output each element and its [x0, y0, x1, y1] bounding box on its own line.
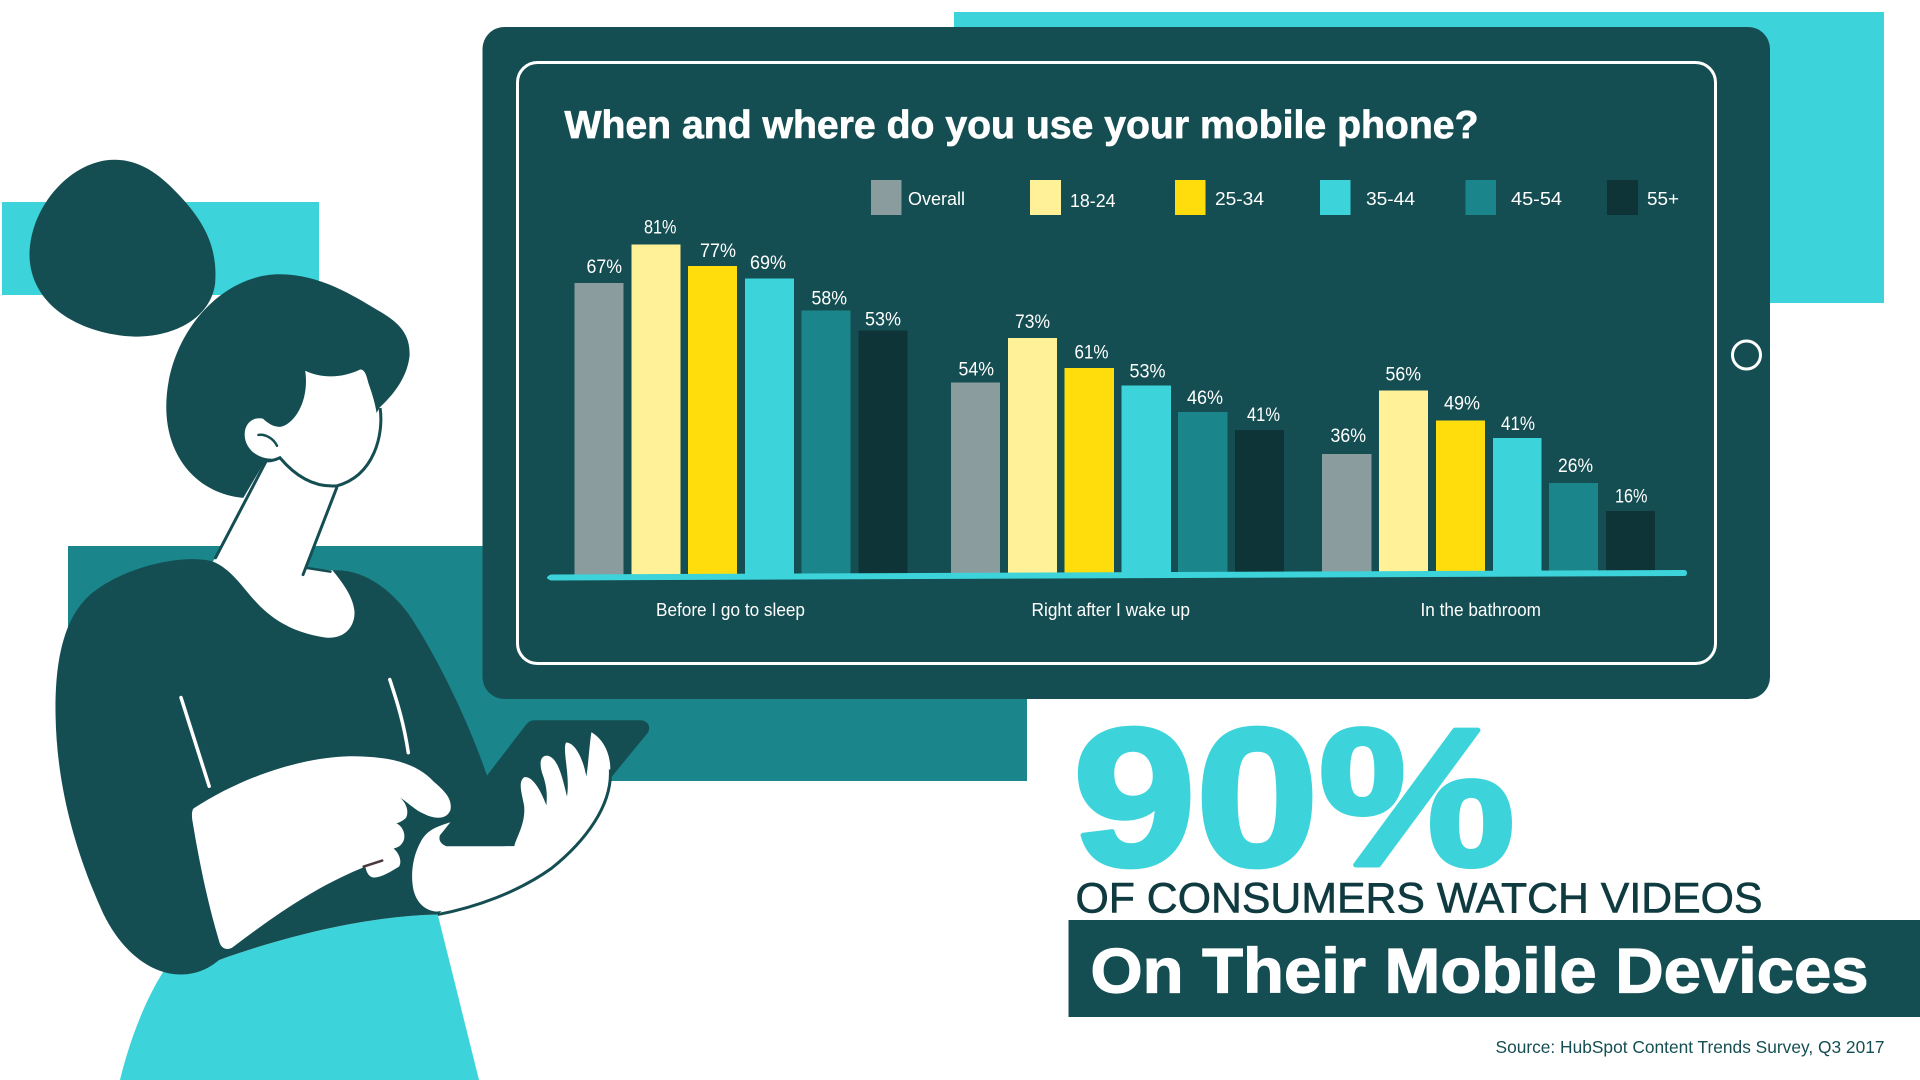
category label: Right after I wake up	[1032, 599, 1190, 620]
ear detail	[258, 435, 277, 446]
finger line	[364, 861, 382, 867]
hand outline	[438, 769, 610, 915]
bar: 45-54 46%	[1178, 388, 1228, 573]
bar: 35-44 41%: 41%	[1501, 414, 1535, 435]
bar: 18-24 81%	[632, 218, 680, 574]
bar: 45-54 58%: 58%	[812, 288, 847, 310]
legend item: 35-44: 35-44	[1366, 188, 1415, 209]
bar: 55+ 53%	[858, 310, 908, 574]
legend item: 55+: 55+	[1647, 188, 1679, 209]
bar: 25-34 49%: 49%	[1444, 394, 1480, 414]
legend	[871, 180, 1679, 215]
legend item: 45-54: 45-54	[1511, 188, 1562, 209]
background block: cyan top right	[954, 12, 1884, 303]
legend item: Overall	[871, 180, 965, 215]
bar: 18-24 56%: 56%	[1386, 364, 1421, 386]
neck lines	[216, 461, 337, 575]
bar cluster: Before I go to sleep	[574, 218, 908, 620]
bar: 25-34 61%: 61%	[1074, 342, 1109, 364]
background block: teal centre	[68, 546, 1027, 781]
statistic caption: OF CONSUMERS WATCH VIDEOS	[1076, 876, 1762, 922]
sleeve lines	[181, 680, 408, 786]
bar: 35-44 53%: 53%	[1130, 362, 1166, 382]
category label: Before I go to sleep	[656, 599, 805, 620]
hair	[166, 274, 410, 498]
bar: 45-54 26%: 26%	[1558, 456, 1593, 477]
bar: 18-24 56%	[1379, 364, 1428, 572]
bar: 55+ 53%: 53%	[865, 310, 901, 330]
face outline	[265, 408, 381, 486]
bar cluster: Right after I wake up	[951, 312, 1284, 620]
bar: 25-34 77%: 77%	[700, 241, 736, 262]
face	[245, 370, 378, 485]
bar: 25-34 49%	[1436, 394, 1485, 572]
skirt	[120, 915, 479, 1080]
bar: 35-44 69%: 69%	[750, 253, 786, 274]
illustration: woman holding a tablet	[29, 160, 649, 1080]
background block: cyan left	[2, 202, 319, 295]
bar: 45-54 46%: 46%	[1187, 388, 1223, 409]
hair bun	[29, 160, 215, 337]
bar: 18-24 81%: 81%	[644, 218, 677, 238]
bar: 18-24 73%: 73%	[1015, 312, 1050, 333]
category label: In the bathroom	[1420, 599, 1541, 620]
bar: 45-54 26%	[1549, 456, 1598, 572]
chart baseline	[547, 570, 1687, 580]
legend item: 35-44	[1320, 180, 1415, 215]
bar: 35-44 69%	[745, 253, 794, 576]
chart title: When and where do you use your mobile phone?	[564, 104, 1478, 147]
holding hand	[412, 732, 610, 912]
banner background	[1068, 920, 1920, 1017]
bar: 35-44 53%	[1122, 362, 1171, 576]
big statistic: 90%	[1073, 688, 1515, 907]
legend item: 18-24: 18-24	[1070, 190, 1116, 211]
large tablet frame	[482, 27, 1770, 699]
bar: Overall 36%: 36%	[1330, 426, 1366, 447]
tablet screen outline	[518, 62, 1716, 664]
bar: 35-44 41%	[1493, 414, 1542, 573]
handheld tablet	[439, 720, 649, 846]
neckline	[213, 548, 355, 638]
legend item: 25-34	[1175, 180, 1264, 215]
neck	[213, 458, 337, 602]
bar: Overall 54%	[951, 360, 1000, 574]
tablet home button	[1732, 341, 1760, 369]
bar: 45-54 58%	[802, 288, 850, 574]
pointing arm	[192, 756, 451, 949]
bar: 55+ 16%	[1606, 486, 1655, 571]
bar cluster: In the bathroom	[1322, 364, 1655, 620]
legend item: 45-54	[1466, 180, 1562, 215]
bar: Overall 67%	[574, 257, 624, 575]
torso	[56, 559, 505, 974]
collar line	[307, 568, 330, 572]
bar: 18-24 73%	[1008, 312, 1057, 573]
bar: 55+ 16%: 16%	[1615, 486, 1648, 508]
bar: 55+ 41%	[1235, 405, 1284, 573]
bar: 25-34 61%	[1064, 342, 1114, 573]
legend item: Overall: Overall	[908, 188, 965, 209]
legend item: 55+	[1607, 180, 1679, 215]
bar: 25-34 77%	[688, 241, 737, 574]
banner text: On Their Mobile Devices	[1090, 936, 1868, 1006]
bar: Overall 36%	[1322, 426, 1372, 572]
bar: 55+ 41%: 41%	[1247, 405, 1280, 426]
legend item: 25-34: 25-34	[1215, 188, 1264, 209]
bar: Overall 67%: 67%	[586, 257, 622, 278]
source note: Source: HubSpot Content Trends Survey, Q3 2017	[1496, 1037, 1884, 1057]
legend item: 18-24	[1030, 180, 1116, 215]
bar chart	[547, 218, 1687, 620]
bar: Overall 54%: 54%	[958, 360, 994, 380]
banner	[1068, 920, 1920, 1017]
